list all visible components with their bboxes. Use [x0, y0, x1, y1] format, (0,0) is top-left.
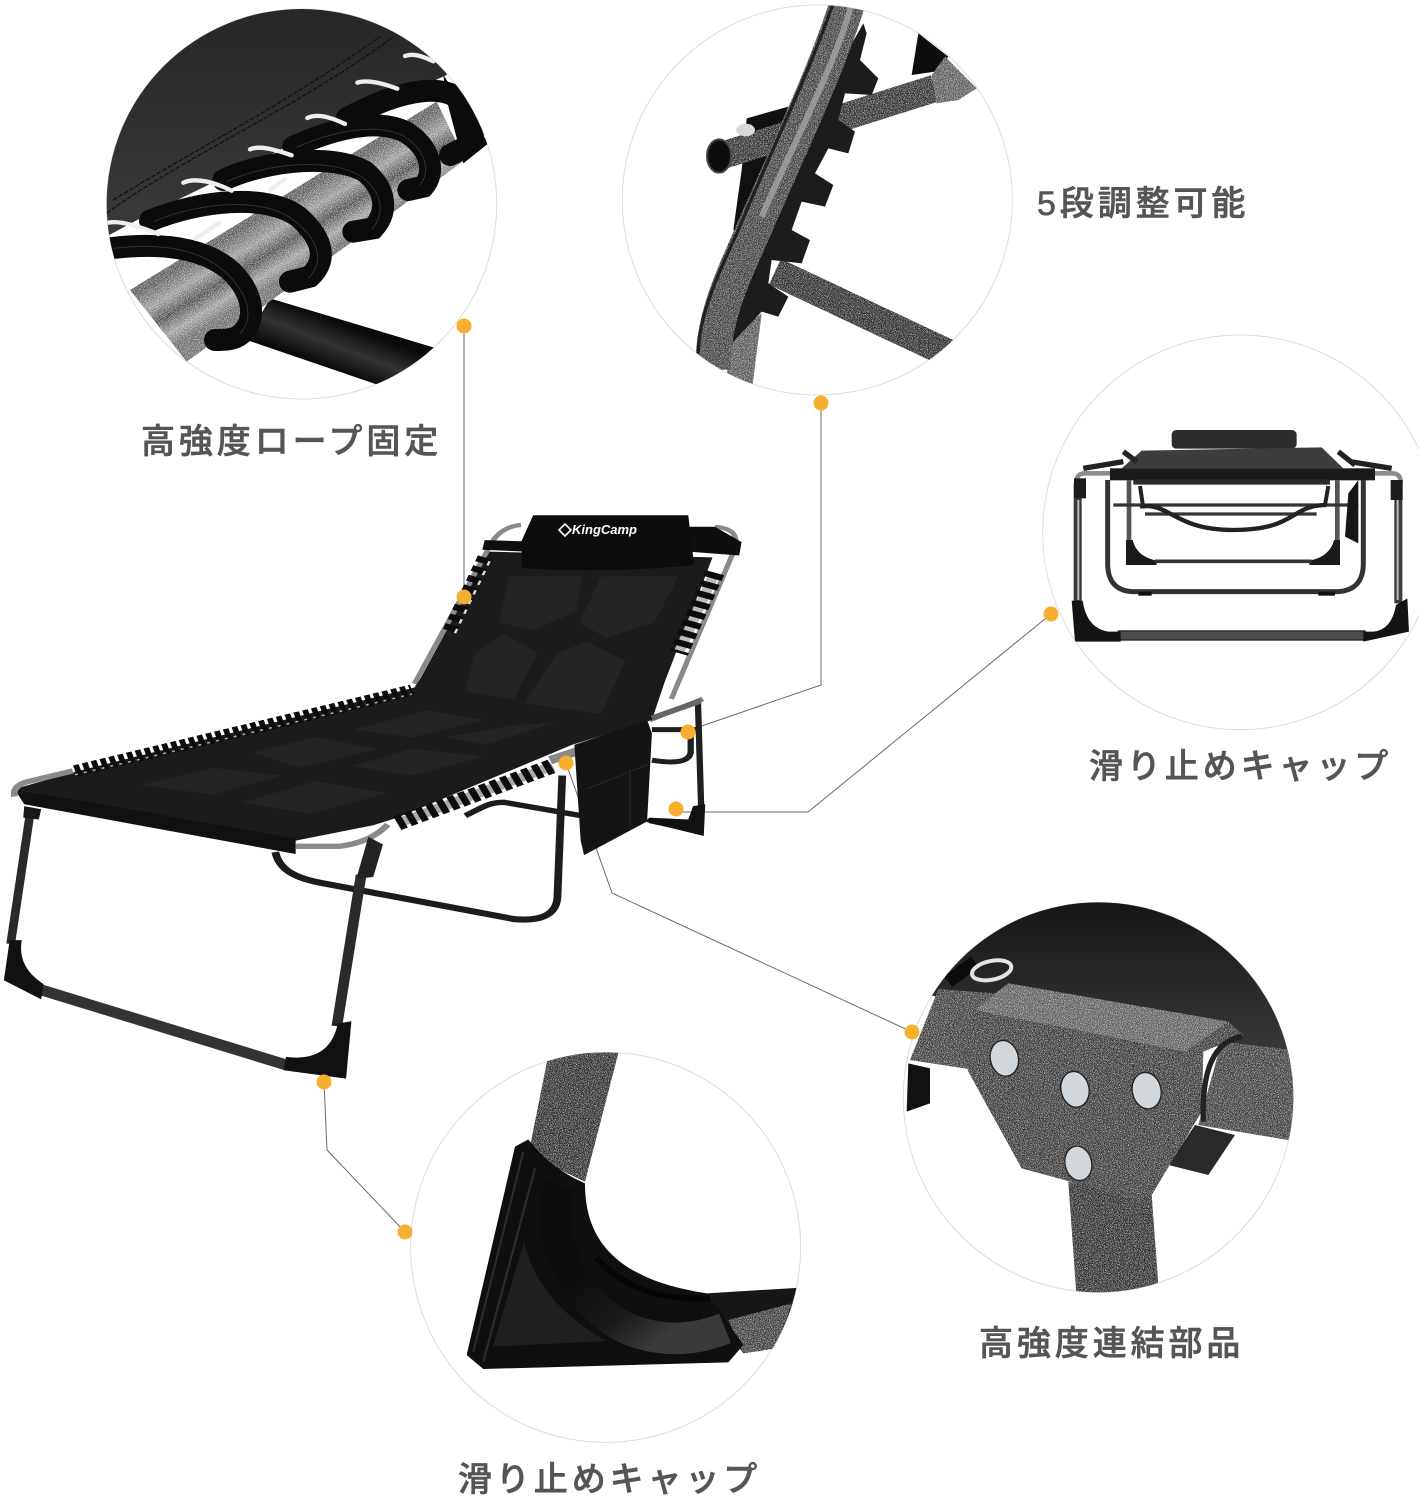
front frame	[14, 771, 388, 846]
horizontal tube	[707, 1288, 800, 1353]
inner legs	[1129, 480, 1337, 543]
curved rail	[1140, 505, 1327, 530]
rivets	[987, 1038, 1164, 1183]
rope highlights	[113, 129, 426, 333]
eyelets	[108, 55, 433, 239]
back fabric	[1122, 447, 1343, 468]
notched bracket	[725, 23, 878, 343]
label: rope fixing: 高強度ロープ固定	[141, 423, 442, 461]
left tube	[910, 989, 995, 1070]
front band	[15, 789, 296, 854]
detail circle: foot cap	[411, 1047, 801, 1442]
black lower bar	[247, 298, 437, 387]
left foot cap	[4, 940, 44, 999]
back frame left	[414, 525, 521, 684]
support rail	[275, 776, 562, 920]
plate	[958, 983, 1243, 1200]
cap triangle panel	[493, 1242, 607, 1347]
main tube	[713, 0, 848, 370]
bottom bar	[41, 990, 288, 1066]
upper cross tube	[718, 88, 935, 157]
top frame	[1077, 473, 1401, 482]
quilting	[141, 577, 679, 814]
tube open end	[707, 139, 731, 173]
outer legs	[1078, 483, 1398, 607]
pillow	[521, 515, 694, 570]
label: high-strength connector: 高強度連結部品	[979, 1325, 1244, 1363]
detail circle: adjuster	[622, 0, 1012, 395]
front right leg	[337, 875, 361, 1026]
rope loops	[110, 91, 474, 340]
outer bottom bar	[1118, 631, 1365, 640]
connector	[550, 751, 579, 760]
black edge behind last loop	[443, 75, 488, 163]
detail circle: front view of lounger	[1043, 335, 1419, 730]
pillow	[1172, 430, 1297, 449]
fabric	[932, 902, 1290, 1059]
central lounger	[4, 515, 742, 1079]
callout lines	[324, 326, 1051, 1232]
middle leg frame	[1108, 480, 1363, 592]
seat right ropes	[397, 766, 553, 823]
seat left ropes	[75, 690, 412, 771]
right foot cap	[1363, 598, 1409, 642]
brand logo: KingCamp	[572, 522, 637, 537]
fabric	[100, 0, 447, 240]
ribs	[473, 1152, 535, 1362]
eyelet	[948, 962, 975, 982]
label: anti-slip cap right: 滑り止めキャップ	[1089, 748, 1392, 786]
front left leg	[11, 814, 30, 944]
cap arm	[556, 1185, 725, 1338]
label: anti-slip cap bottom: 滑り止めキャップ	[458, 1461, 761, 1499]
top straps	[482, 540, 526, 552]
top-right bracket	[912, 33, 948, 75]
lower cross tube	[775, 272, 952, 355]
rear leg and rail	[649, 703, 701, 830]
right tube	[1198, 1042, 1308, 1143]
detail circle: connector	[903, 895, 1308, 1298]
plate top bend	[975, 983, 1228, 1052]
rear plate	[733, 107, 788, 232]
side pocket	[1345, 480, 1358, 543]
back frame right	[671, 527, 736, 699]
right foot cap	[284, 1021, 351, 1079]
shadowed bracket	[1168, 1125, 1235, 1175]
cap body	[467, 1139, 743, 1369]
rivet	[736, 124, 755, 136]
detail circle: rope fixing	[100, 0, 497, 399]
second rail	[727, 313, 762, 387]
side pocket	[574, 720, 652, 855]
back hinges	[1083, 452, 1392, 468]
back right ropes	[679, 573, 715, 653]
front band	[1110, 468, 1375, 480]
fabric back and seat	[15, 552, 713, 841]
cross bars	[1113, 505, 1358, 514]
rear foot	[645, 804, 705, 836]
label: five-step adjustment: 5段調整可能	[1037, 185, 1249, 223]
upright tube	[528, 1047, 620, 1182]
collar	[1203, 1037, 1242, 1122]
seam	[107, 37, 393, 213]
silver tube	[130, 102, 465, 362]
leg	[1068, 1182, 1158, 1298]
back left ropes	[448, 557, 485, 634]
black strap	[907, 1063, 930, 1112]
left foot cap	[1072, 601, 1121, 642]
callout dots	[316, 318, 1058, 1240]
